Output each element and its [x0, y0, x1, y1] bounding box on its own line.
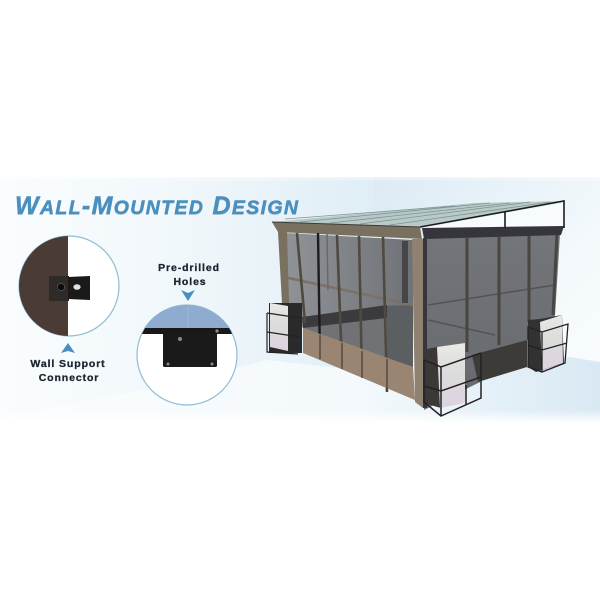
- right screen wall: [423, 234, 560, 410]
- callout: pre-drilled holes: [137, 262, 237, 405]
- planter: front: [424, 343, 481, 416]
- gazebo: [267, 201, 568, 416]
- callout: wall support connector: Connector: [39, 372, 99, 384]
- title: WALL-MOUNTED DESIGN: [15, 192, 299, 220]
- planter: left: [267, 303, 302, 354]
- arrow up: [61, 343, 75, 353]
- corner post: [412, 239, 423, 408]
- arrow down: [181, 290, 195, 301]
- label: Wall Support: [30, 358, 106, 370]
- background room: [0, 172, 600, 423]
- callout: pre-drilled holes: Holes: [173, 276, 207, 288]
- left glass wall: [278, 232, 423, 408]
- detail circle: wall bracket: [19, 236, 119, 336]
- label: Pre-drilled: [158, 262, 220, 274]
- callout: wall support connector: [19, 236, 119, 384]
- title: WALL-MOUNTED DESIGN: [15, 193, 299, 221]
- detail circle: panel bracket: [137, 304, 237, 405]
- lower panels: [303, 328, 415, 400]
- planter: right: [528, 315, 568, 372]
- roof: [272, 201, 564, 239]
